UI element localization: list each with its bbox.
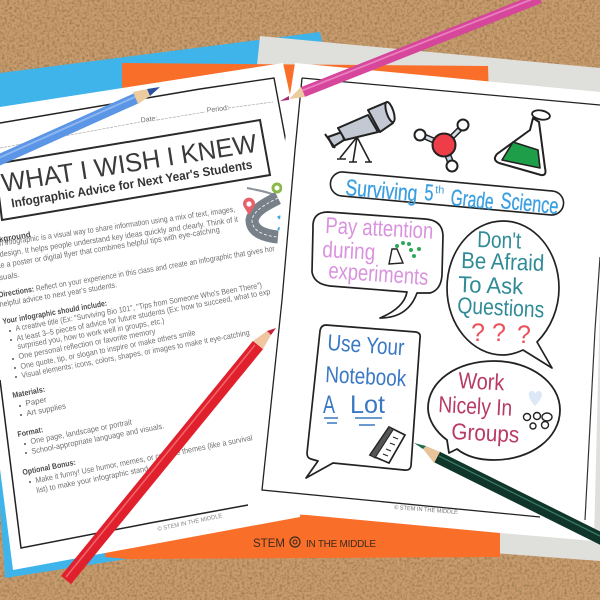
name and date line: Period:	[206, 105, 229, 114]
title box: Infographic Advice for Next Year's Students	[10, 158, 253, 210]
instructions text: At least 3–5 pieces of advice for future students (Ex: how to succeed, what to exp	[16, 287, 272, 343]
title box: WHAT I WISH I KNEW	[0, 128, 259, 198]
orange paper brand text: STEM	[253, 536, 285, 550]
icon: group of circles	[524, 412, 552, 429]
instructions text: Paper	[25, 395, 48, 408]
speech bubble: don't be afraid: ?	[517, 321, 531, 349]
title box	[0, 120, 270, 220]
instructions text: An infographic is a visual way to share information using a mix of text, images,	[0, 205, 236, 249]
title banner: Grade	[449, 184, 495, 214]
blue colored pencil	[0, 87, 160, 163]
instructions text: Art supplies	[26, 401, 67, 418]
instructions text: One page, landscape or portrait	[30, 417, 133, 446]
speech bubble: don't be afraid	[447, 221, 559, 368]
instructions text: Make it funny! Use humor, memes, or creative themes (like a survival	[35, 433, 253, 485]
speech bubble: don't be afraid: ?	[492, 319, 506, 347]
left worksheet copyright: © STEM IN THE MIDDLE	[157, 512, 223, 533]
icon: molecule	[414, 120, 468, 172]
instructions text: One personal reflection or favorite memory	[18, 327, 156, 361]
instructions text: Directions: Reflect on your experience in this class and create an infographic that gives hor	[0, 244, 276, 299]
title banner	[329, 171, 565, 219]
instructions text: Visual elements: icons, colors, shapes, or images to make it eye-catching	[21, 328, 250, 380]
instructions text: helpful advice to next year's students.	[0, 280, 118, 309]
speech bubble: use your notebook: Lot	[350, 391, 385, 419]
speech bubble: use your notebook: Notebook	[325, 361, 407, 391]
orange paper	[105, 63, 500, 559]
orange paper brand text	[253, 536, 376, 550]
right worksheet	[262, 63, 600, 541]
title banner: Science	[499, 187, 560, 219]
instructions text: Your infographic should include:	[2, 299, 108, 326]
instructions text: list) to make your infographic stand out!	[36, 461, 163, 495]
speech bubble: use your notebook: Use Your	[327, 329, 406, 360]
icon: winding road with pins	[243, 184, 287, 237]
speech bubble: use your notebook	[306, 325, 420, 478]
icon: flask	[495, 109, 551, 175]
title banner: Surviving	[345, 174, 419, 206]
instructions text: One quote, tip, or slogan to inspire or make others smile	[20, 328, 197, 371]
instructions text: School-appropriate language and visuals.	[31, 421, 165, 456]
icon: notebook	[370, 427, 405, 463]
name and date line: Date:	[140, 115, 158, 124]
instructions text: A creative title (Ex: "Surviving Bio 101", "Tips from Someone Who's Been There")	[15, 281, 263, 333]
speech bubble: use your notebook: A	[323, 391, 335, 419]
icon: telescope	[325, 101, 397, 162]
speech bubble: pay attention: Pay attention	[325, 212, 434, 244]
speech bubble: work nicely: Nicely In	[438, 391, 513, 421]
title banner: 5	[424, 179, 434, 206]
right worksheet copyright: © STEM IN THE MIDDLE	[394, 504, 458, 516]
bullet dots	[9, 330, 31, 483]
pink colored pencil	[280, 0, 540, 101]
instructions text: like a poster or digital flyer that combines helpful tips with eye-catching	[0, 225, 220, 271]
speech bubble: don't be afraid: To Ask	[458, 271, 524, 299]
speech bubble: don't be afraid: Don't	[477, 226, 522, 254]
name and date line	[0, 102, 273, 148]
instructions text: Optional Bonus:	[22, 458, 76, 477]
speech bubble: work nicely: Groups	[451, 418, 520, 448]
instructions text: Materials:	[12, 385, 46, 400]
speech bubble: work nicely: Work	[458, 367, 505, 395]
red colored pencil	[66, 328, 276, 580]
instructions text: surprised you, how to work well in groups, etc.)	[17, 316, 165, 351]
speech bubble: pay attention: during	[322, 236, 376, 265]
icon: light blue heart	[529, 391, 542, 406]
title banner: th	[435, 184, 445, 197]
icon: tiny flask with green dots	[389, 241, 421, 264]
gray paper	[257, 36, 600, 561]
instructions text	[0, 205, 276, 495]
blue paper	[0, 32, 330, 578]
instructions text: Format:	[17, 425, 44, 439]
speech bubble: don't be afraid: ?	[471, 319, 485, 347]
speech bubble: pay attention	[312, 212, 443, 318]
speech bubble: don't be afraid: Be Afraid	[461, 247, 545, 276]
speech bubble: don't be afraid: Questions	[457, 292, 545, 323]
speech bubble: work nicely	[428, 361, 560, 460]
dark green colored pencil	[414, 443, 600, 541]
left worksheet	[0, 63, 300, 570]
orange paper brand text: IN THE MIDDLE	[306, 539, 376, 550]
speech bubble: pay attention: experiments	[328, 257, 429, 290]
